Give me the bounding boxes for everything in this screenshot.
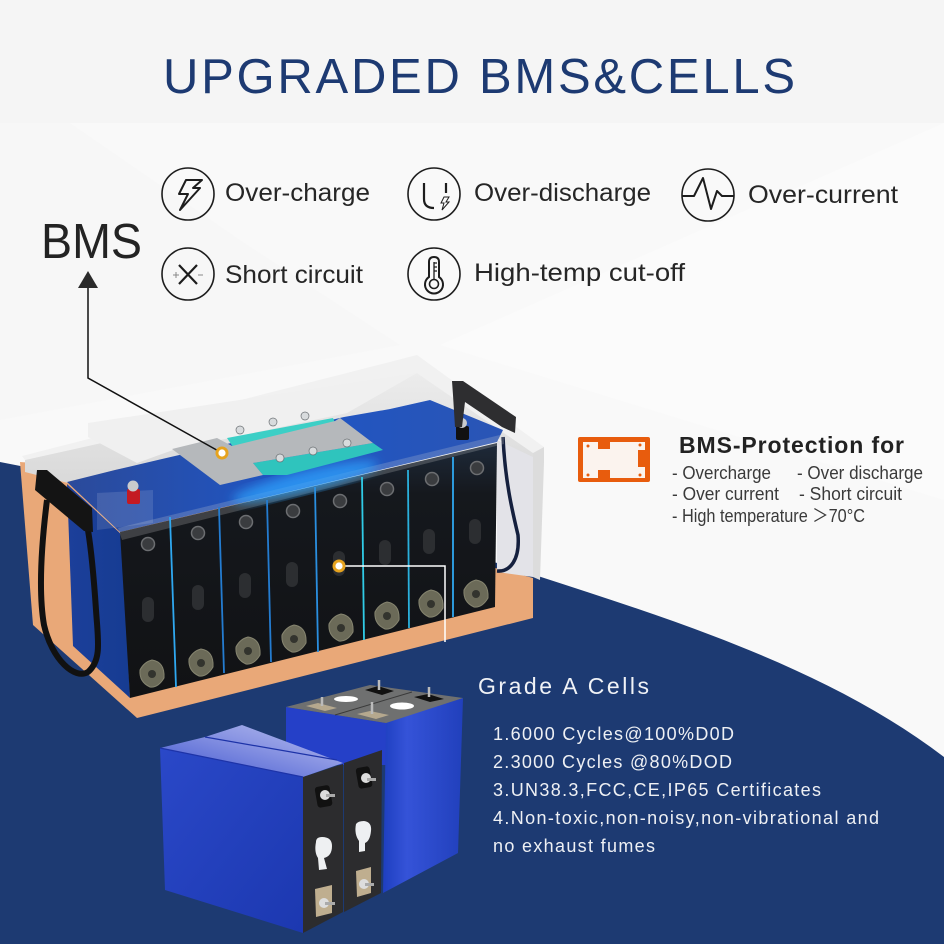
cell upper terminals xyxy=(314,766,376,808)
text: BMS protection: - Overcharge xyxy=(672,463,771,483)
header band xyxy=(0,0,944,123)
left rope xyxy=(41,500,98,674)
cell holes xyxy=(315,821,371,870)
transparent case xyxy=(22,355,544,580)
cell dividers xyxy=(170,457,453,687)
list: grade A cell features: 4.Non-toxic,non-noisy,non-vibrational and xyxy=(493,808,879,828)
battery top xyxy=(67,400,503,532)
text: BMS protection xyxy=(672,432,923,526)
blue glow xyxy=(230,453,380,511)
illustration: grade A cells xyxy=(160,680,463,933)
cell marker dot xyxy=(332,560,346,572)
negative terminal xyxy=(456,418,469,440)
text: BMS protection: - Over discharge xyxy=(797,463,923,483)
list: grade A cell features: 3.UN38.3,FCC,CE,IP65 Certificates xyxy=(493,780,821,800)
left handle xyxy=(35,470,93,532)
vent circles xyxy=(142,462,484,550)
navy background curve xyxy=(0,462,944,944)
label: short circuit: Short circuit xyxy=(225,261,363,289)
front cell tops xyxy=(160,725,343,777)
icon: over-current xyxy=(682,169,734,221)
cell pointer line xyxy=(339,566,445,642)
text: BMS protection: - High temperature ＞70°C xyxy=(672,506,865,526)
arrow: BMS pointer xyxy=(78,271,222,453)
icon: thermometer xyxy=(408,248,460,300)
front cell side xyxy=(160,748,303,933)
text: BMS protection: - Over current xyxy=(672,484,779,504)
icon: over-discharge xyxy=(408,168,460,220)
BMS circuit board xyxy=(172,412,383,485)
label: high-temp cut-off: High-temp cut-off xyxy=(474,259,685,287)
BMS label: BMS xyxy=(41,215,142,269)
back right cell side xyxy=(383,698,463,893)
heading: grade A cells: Grade A Cells xyxy=(478,673,649,699)
board bolts xyxy=(236,412,351,462)
cell lower terminals xyxy=(315,867,374,917)
back cell terminals xyxy=(306,680,444,719)
icon: short circuit xyxy=(162,248,214,300)
text: BMS protection: BMS-Protection for xyxy=(679,432,904,458)
title: UPGRADED BMS&CELLS xyxy=(163,50,795,104)
icon: BMS board xyxy=(578,437,650,482)
label: over-current: Over-current xyxy=(748,181,898,209)
label: over-charge: Over-charge xyxy=(225,179,370,207)
label: over-discharge: Over-discharge xyxy=(474,179,651,207)
top edge band xyxy=(118,434,504,540)
battery tray xyxy=(20,462,533,718)
battery left side xyxy=(67,484,130,698)
right handle xyxy=(452,381,516,433)
terminal window xyxy=(97,490,153,530)
background facets xyxy=(0,123,944,500)
front cell black faces xyxy=(303,764,343,933)
list: grade A cell features: no exhaust fumes xyxy=(493,836,655,856)
illustration: battery xyxy=(20,355,544,718)
cell terminals xyxy=(140,580,488,687)
icon: over-charge xyxy=(162,168,214,220)
list: grade A cell features: 1.6000 Cycles@100%D0D xyxy=(493,724,734,744)
BMS marker dot xyxy=(216,446,228,460)
list: grade A cell features xyxy=(493,724,879,856)
cell pills xyxy=(142,519,481,622)
battery front face xyxy=(120,443,497,698)
list: grade A cell features: 2.3000 Cycles @80%DOD xyxy=(493,752,732,772)
text: BMS protection: - Short circuit xyxy=(799,484,902,504)
right rope xyxy=(497,437,518,571)
positive terminal xyxy=(127,480,140,504)
back cell fronts xyxy=(286,707,336,765)
back cell tops xyxy=(286,685,463,723)
